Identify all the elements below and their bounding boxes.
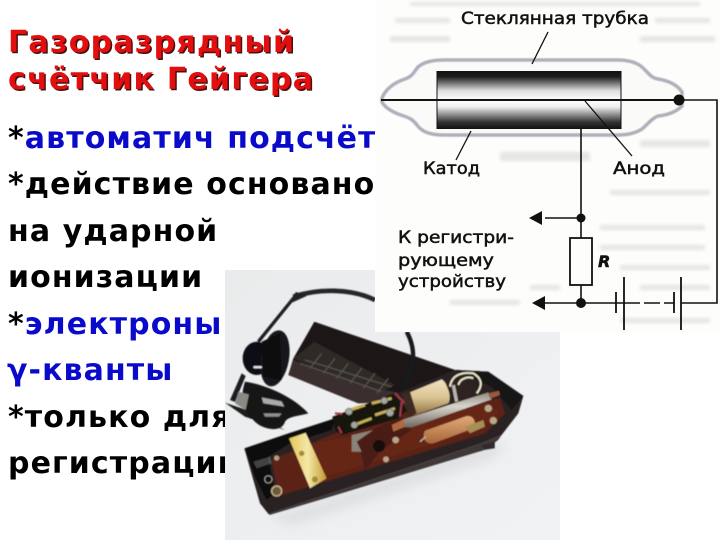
- shadow: [268, 443, 508, 527]
- metal tube: [402, 392, 492, 427]
- resistor: [424, 416, 475, 444]
- battery: [616, 277, 681, 330]
- cathode cylinder: [437, 71, 621, 129]
- bullet: electrons: *электроны: [8, 307, 222, 342]
- text block: properties list: [7, 121, 377, 481]
- text line: gamma quanta: γ-кванты: [7, 353, 174, 388]
- text line: registration: регистрации: [8, 446, 240, 481]
- title: Газоразрядный: [8, 25, 295, 60]
- upper lid: [288, 322, 455, 403]
- bullet: impact ionization: *действие основано: [8, 167, 375, 202]
- board parts: [373, 440, 385, 452]
- glass tube: [382, 60, 682, 135]
- text line: ionization: ионизации: [8, 260, 203, 295]
- headphone band: [293, 291, 375, 300]
- bullet: automatic counting: *автоматич подсчёт: [8, 121, 377, 156]
- terminal block: [332, 394, 407, 435]
- lower case: [244, 370, 523, 514]
- text line: on impact: на ударной: [8, 214, 218, 249]
- wire loop: [402, 332, 413, 388]
- junction dots: [576, 94, 684, 308]
- sockets: [265, 476, 272, 483]
- faint bleed-through print: [390, 2, 715, 323]
- circuit board: [272, 398, 505, 495]
- diagram labels: Стеклянная трубка: [461, 9, 649, 29]
- diagram labels: R: [598, 252, 610, 271]
- diagram labels: Анод: [613, 159, 665, 179]
- diagram labels: К регистри-: [398, 228, 514, 248]
- diagram labels: рующему: [398, 251, 494, 271]
- diagram labels: устройству: [398, 272, 506, 292]
- anode wire and circuit: [381, 71, 717, 303]
- resistor R: [570, 238, 592, 285]
- title: [8, 25, 314, 97]
- title: счётчик Гейгера: [8, 62, 314, 97]
- diagram labels: Катод: [423, 159, 480, 179]
- label lines: [456, 32, 632, 160]
- bullet: only for: *только для: [8, 400, 232, 435]
- diagram labels: [398, 9, 665, 292]
- earphone: [243, 342, 271, 375]
- tube wiring: [445, 377, 482, 403]
- brass strip: [289, 433, 327, 488]
- cylindrical capacitor: [403, 379, 450, 415]
- arrows: [529, 211, 545, 310]
